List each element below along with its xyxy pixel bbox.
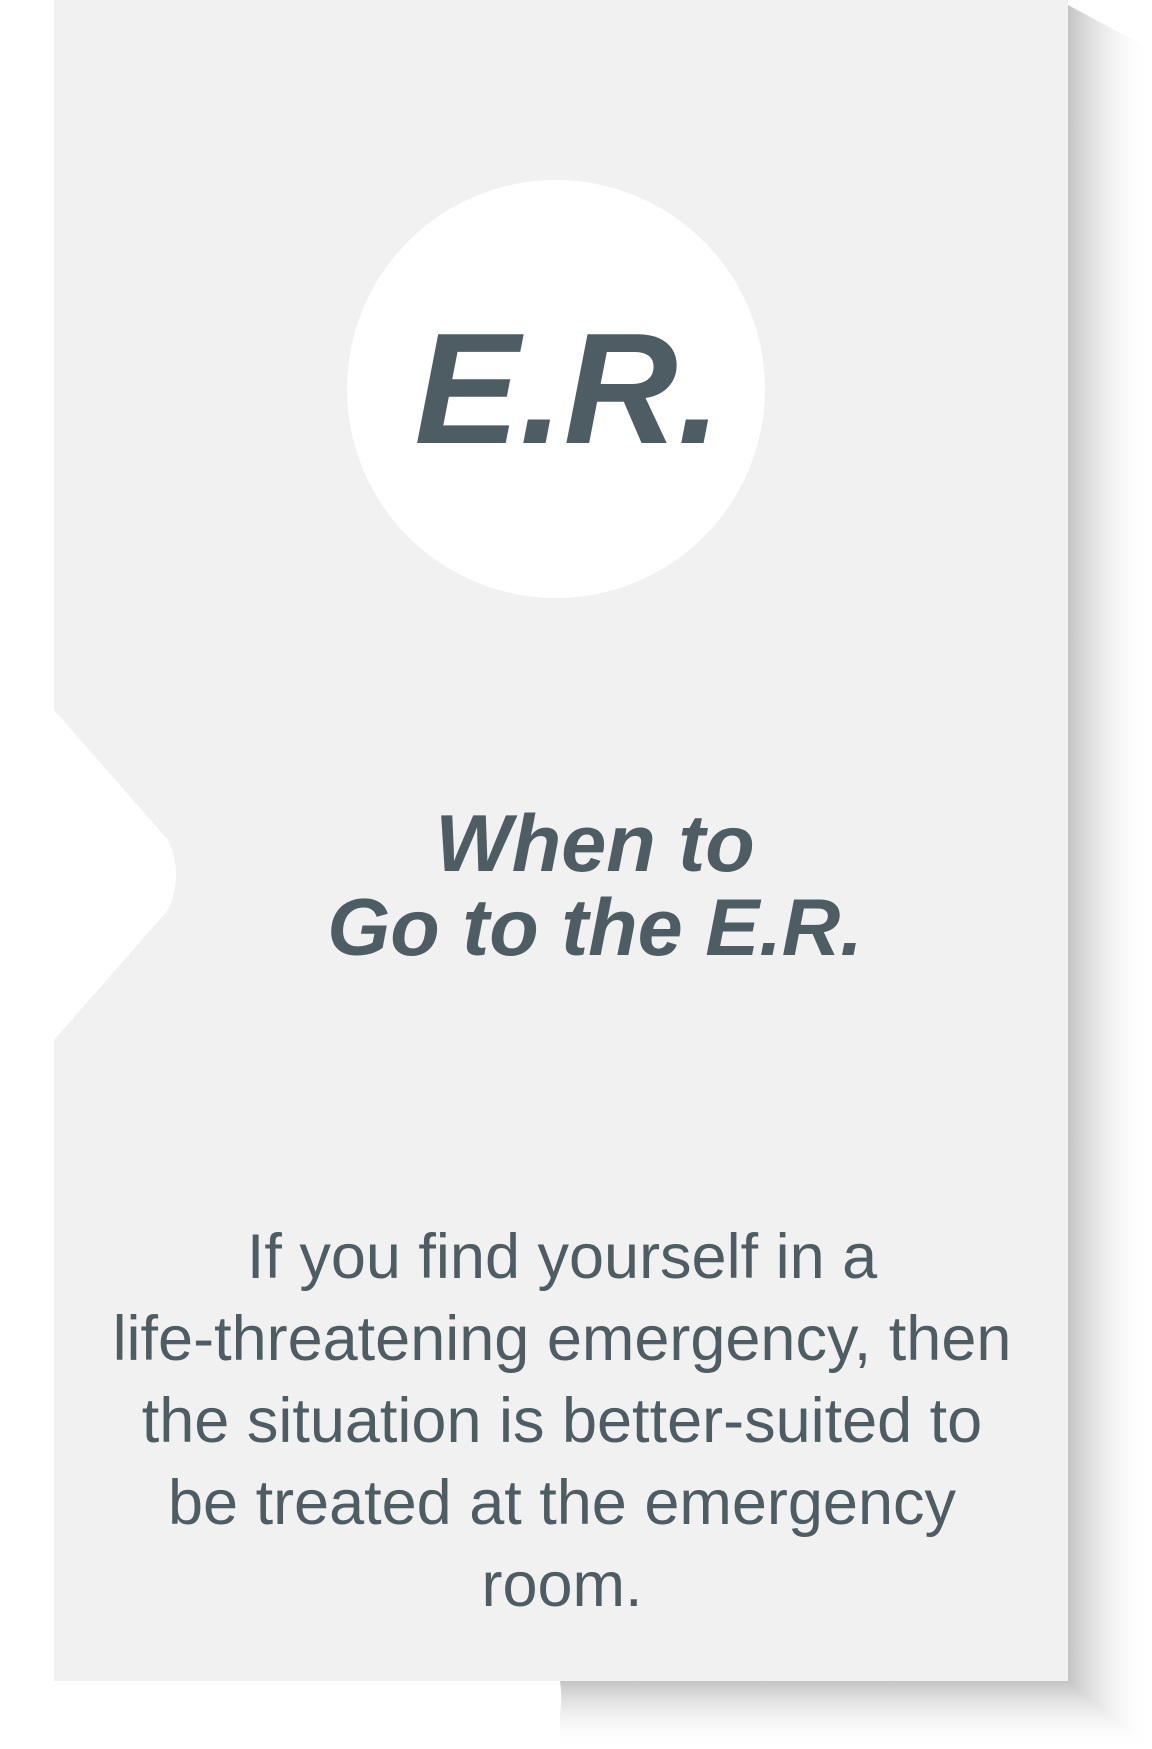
body text: life-threatening emergency, then (113, 1304, 1011, 1374)
body text: the situation is better-suited to (142, 1386, 982, 1456)
icon: E.R. circle: E.R. (414, 301, 722, 477)
icon: E.R. circle (347, 180, 765, 598)
body text: be treated at the emergency (168, 1468, 956, 1538)
heading: When to (435, 799, 755, 889)
body text (113, 1222, 1011, 1620)
heading (327, 799, 863, 973)
body text: room. (481, 1550, 643, 1620)
body text: If you find yourself in a (247, 1222, 877, 1292)
heading: Go to the E.R. (327, 883, 863, 973)
